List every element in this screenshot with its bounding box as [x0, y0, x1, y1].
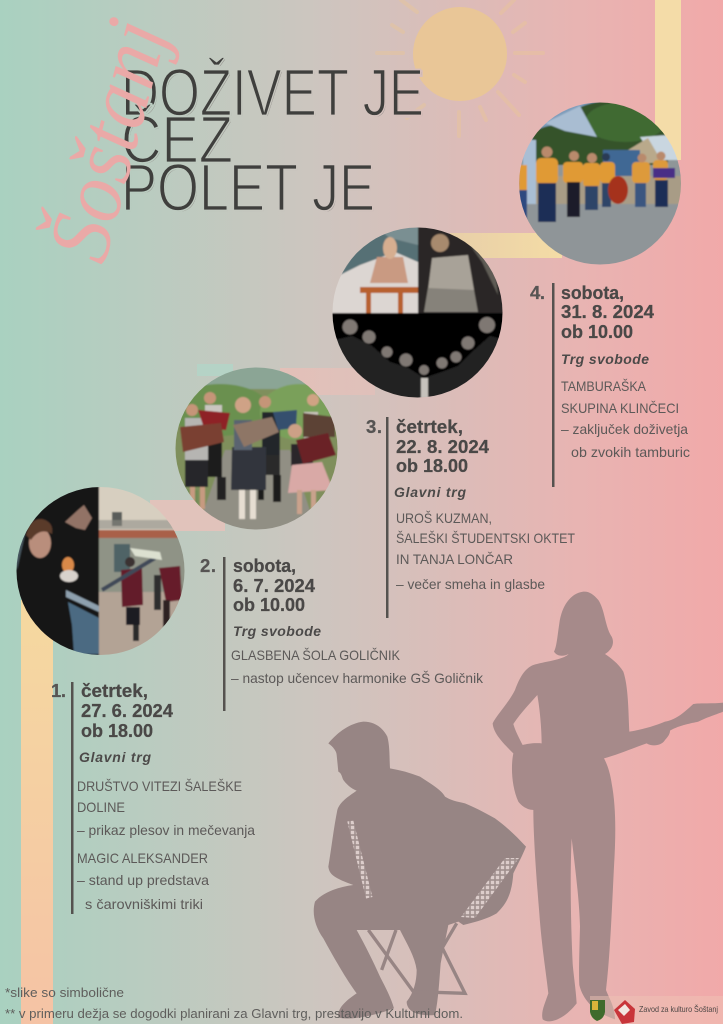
event 4: Trg svobode [561, 351, 649, 367]
event 4: sobota, [561, 282, 624, 303]
photo 2: accordion group [176, 368, 338, 530]
event 2 [200, 555, 484, 711]
yellow strip: left side [21, 600, 53, 1024]
event 2: GLASBENA ŠOLA GOLIČNIK [231, 647, 401, 663]
event 3: Glavni trg [394, 484, 466, 500]
footnotes: ** v primeru dežja se dogodki planirani za Glavni trg, prestavijo v Kulturni dom. [5, 1006, 463, 1021]
event 2: 2. [200, 555, 216, 576]
event 1: Glavni trg [79, 749, 151, 765]
yellow strip: between photos 3 and 4 [450, 233, 562, 258]
event 1: 27. 6. 2024 [81, 700, 174, 721]
event 4: ob 10.00 [561, 321, 633, 342]
event 4: TAMBURAŠKA [561, 378, 647, 394]
event 1: DOLINE [77, 799, 125, 815]
event 3: 22. 8. 2024 [396, 436, 490, 457]
event 3: četrtek, [396, 416, 463, 437]
event 4: 4. [530, 282, 545, 303]
event 4: – zaključek doživetja [561, 421, 688, 437]
event 1: MAGIC ALEKSANDER [77, 850, 208, 866]
event 3: ŠALEŠKI ŠTUDENTSKI OKTET [396, 530, 575, 546]
icon: sun [377, 0, 543, 136]
event 1: s čarovniškimi triki [85, 896, 203, 912]
event 4: ob zvokih tamburic [571, 444, 690, 460]
event 3 [366, 416, 575, 618]
title [121, 56, 425, 227]
event 1: 1. [51, 680, 66, 701]
title: ČEZ [121, 102, 233, 178]
title: DOŽIVET JE [121, 56, 424, 130]
footnotes [5, 985, 463, 1021]
title: ČEZ [122, 104, 234, 179]
event 3: UROŠ KUZMAN, [396, 510, 492, 526]
event 4: 31. 8. 2024 [561, 301, 655, 322]
silhouette: guitarist [493, 592, 723, 1021]
title: DOŽIVET JE [122, 57, 425, 132]
event 2: sobota, [233, 555, 296, 576]
event 1: – prikaz plesov in mečevanja [77, 822, 255, 838]
yellow strip: top right [655, 0, 681, 160]
event 4: SKUPINA KLINČECI [561, 400, 679, 416]
title: POLET JE [121, 150, 375, 226]
logos [590, 996, 723, 1024]
photo 3: three performers [330, 225, 508, 400]
photo 4: tamburica group [515, 100, 685, 270]
event 1 [51, 680, 255, 914]
teal strip: above photo 2 [197, 364, 233, 376]
silhouette: accordion player [314, 722, 526, 1018]
footnotes: *slike so simbolične [5, 985, 124, 1000]
photo 1: magician and sword dancers [14, 486, 189, 656]
event 2: Trg svobode [233, 623, 321, 639]
event 3: IN TANJA LONČAR [396, 551, 513, 567]
event 2: – nastop učencev harmonike GŠ Goličnik [231, 670, 484, 686]
event 2: ob 10.00 [233, 594, 305, 615]
event 3: – večer smeha in glasbe [396, 576, 545, 592]
pink strip: behind photo 1 [150, 500, 225, 531]
title: POLET JE [122, 152, 376, 227]
event 1: ob 18.00 [81, 720, 153, 741]
event 3: 3. [366, 416, 382, 437]
event 1: DRUŠTVO VITEZI ŠALEŠKE [77, 778, 242, 794]
pink strip: behind photo 2 [280, 368, 375, 395]
event 2: 6. 7. 2024 [233, 575, 316, 596]
event 3: ob 18.00 [396, 455, 468, 476]
event 1: – stand up predstava [77, 872, 209, 888]
event 1: četrtek, [81, 680, 148, 701]
script heading: Šoštanj: Šoštanj [30, 9, 187, 271]
event 4 [530, 282, 690, 487]
